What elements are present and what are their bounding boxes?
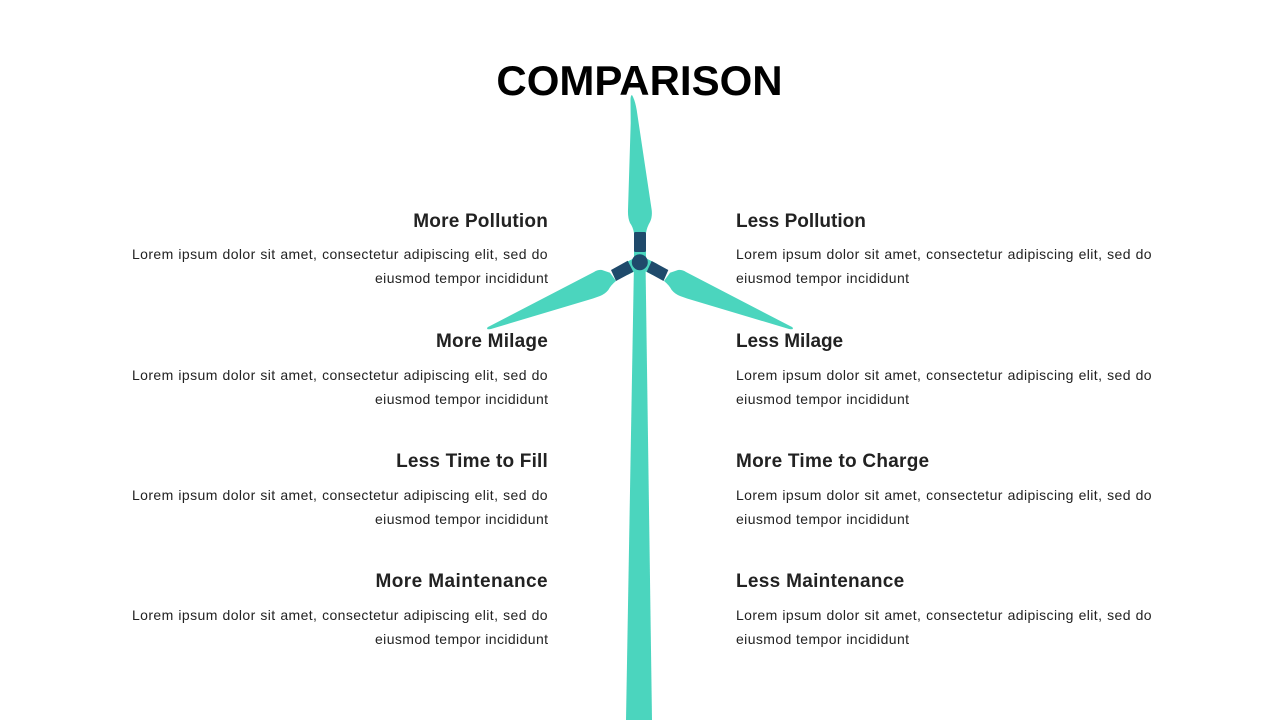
body text line 2: eiusmod tempor incididunt — [375, 391, 548, 407]
blade joint: right — [647, 261, 668, 281]
turbine blade: left — [487, 270, 616, 329]
body text line 1: Lorem ipsum dolor sit amet, consectetur adipiscing elit, sed do — [736, 367, 1152, 383]
body text line 1: Lorem ipsum dolor sit amet, consectetur adipiscing elit, sed do — [132, 487, 548, 503]
blade joint: top — [634, 232, 646, 252]
heading: Less Pollution — [736, 210, 866, 232]
body text line 2: eiusmod tempor incididunt — [736, 391, 909, 407]
body text line 1: Lorem ipsum dolor sit amet, consectetur adipiscing elit, sed do — [736, 246, 1152, 262]
right item: Less Pollution — [736, 210, 1152, 286]
body text line 2: eiusmod tempor incididunt — [736, 270, 909, 286]
heading: Less Maintenance — [736, 570, 904, 592]
right item: Less Milage — [736, 330, 1152, 407]
body text line 1: Lorem ipsum dolor sit amet, consectetur adipiscing elit, sed do — [132, 367, 548, 383]
heading: More Milage — [436, 330, 548, 352]
body text line 1: Lorem ipsum dolor sit amet, consectetur adipiscing elit, sed do — [736, 487, 1152, 503]
turbine blade: top — [628, 95, 652, 233]
heading: Less Time to Fill — [396, 450, 548, 472]
title: COMPARISON — [496, 57, 783, 104]
blade joint: left — [611, 261, 633, 281]
left item: More Maintenance — [132, 570, 548, 647]
body text line 2: eiusmod tempor incididunt — [375, 511, 548, 527]
body text line 1: Lorem ipsum dolor sit amet, consectetur adipiscing elit, sed do — [736, 607, 1152, 623]
heading: More Pollution — [413, 210, 548, 232]
body text line 1: Lorem ipsum dolor sit amet, consectetur adipiscing elit, sed do — [132, 607, 548, 623]
right item: More Time to Charge — [736, 450, 1152, 527]
right item: Less Maintenance — [736, 570, 1152, 647]
heading: More Maintenance — [376, 570, 548, 592]
left item: More Pollution — [132, 210, 548, 286]
turbine blade: right — [664, 270, 793, 329]
heading: Less Milage — [736, 330, 843, 352]
body text line 2: eiusmod tempor incididunt — [375, 270, 548, 286]
turbine tower — [626, 262, 652, 720]
left item: More Milage — [132, 330, 548, 407]
body text line 2: eiusmod tempor incididunt — [736, 631, 909, 647]
heading: More Time to Charge — [736, 450, 929, 472]
left item: Less Time to Fill — [132, 450, 548, 527]
hub stubs — [625, 250, 655, 270]
body text line 1: Lorem ipsum dolor sit amet, consectetur adipiscing elit, sed do — [132, 246, 548, 262]
body text line 2: eiusmod tempor incididunt — [375, 631, 548, 647]
body text line 2: eiusmod tempor incididunt — [736, 511, 909, 527]
turbine hub — [632, 254, 648, 270]
